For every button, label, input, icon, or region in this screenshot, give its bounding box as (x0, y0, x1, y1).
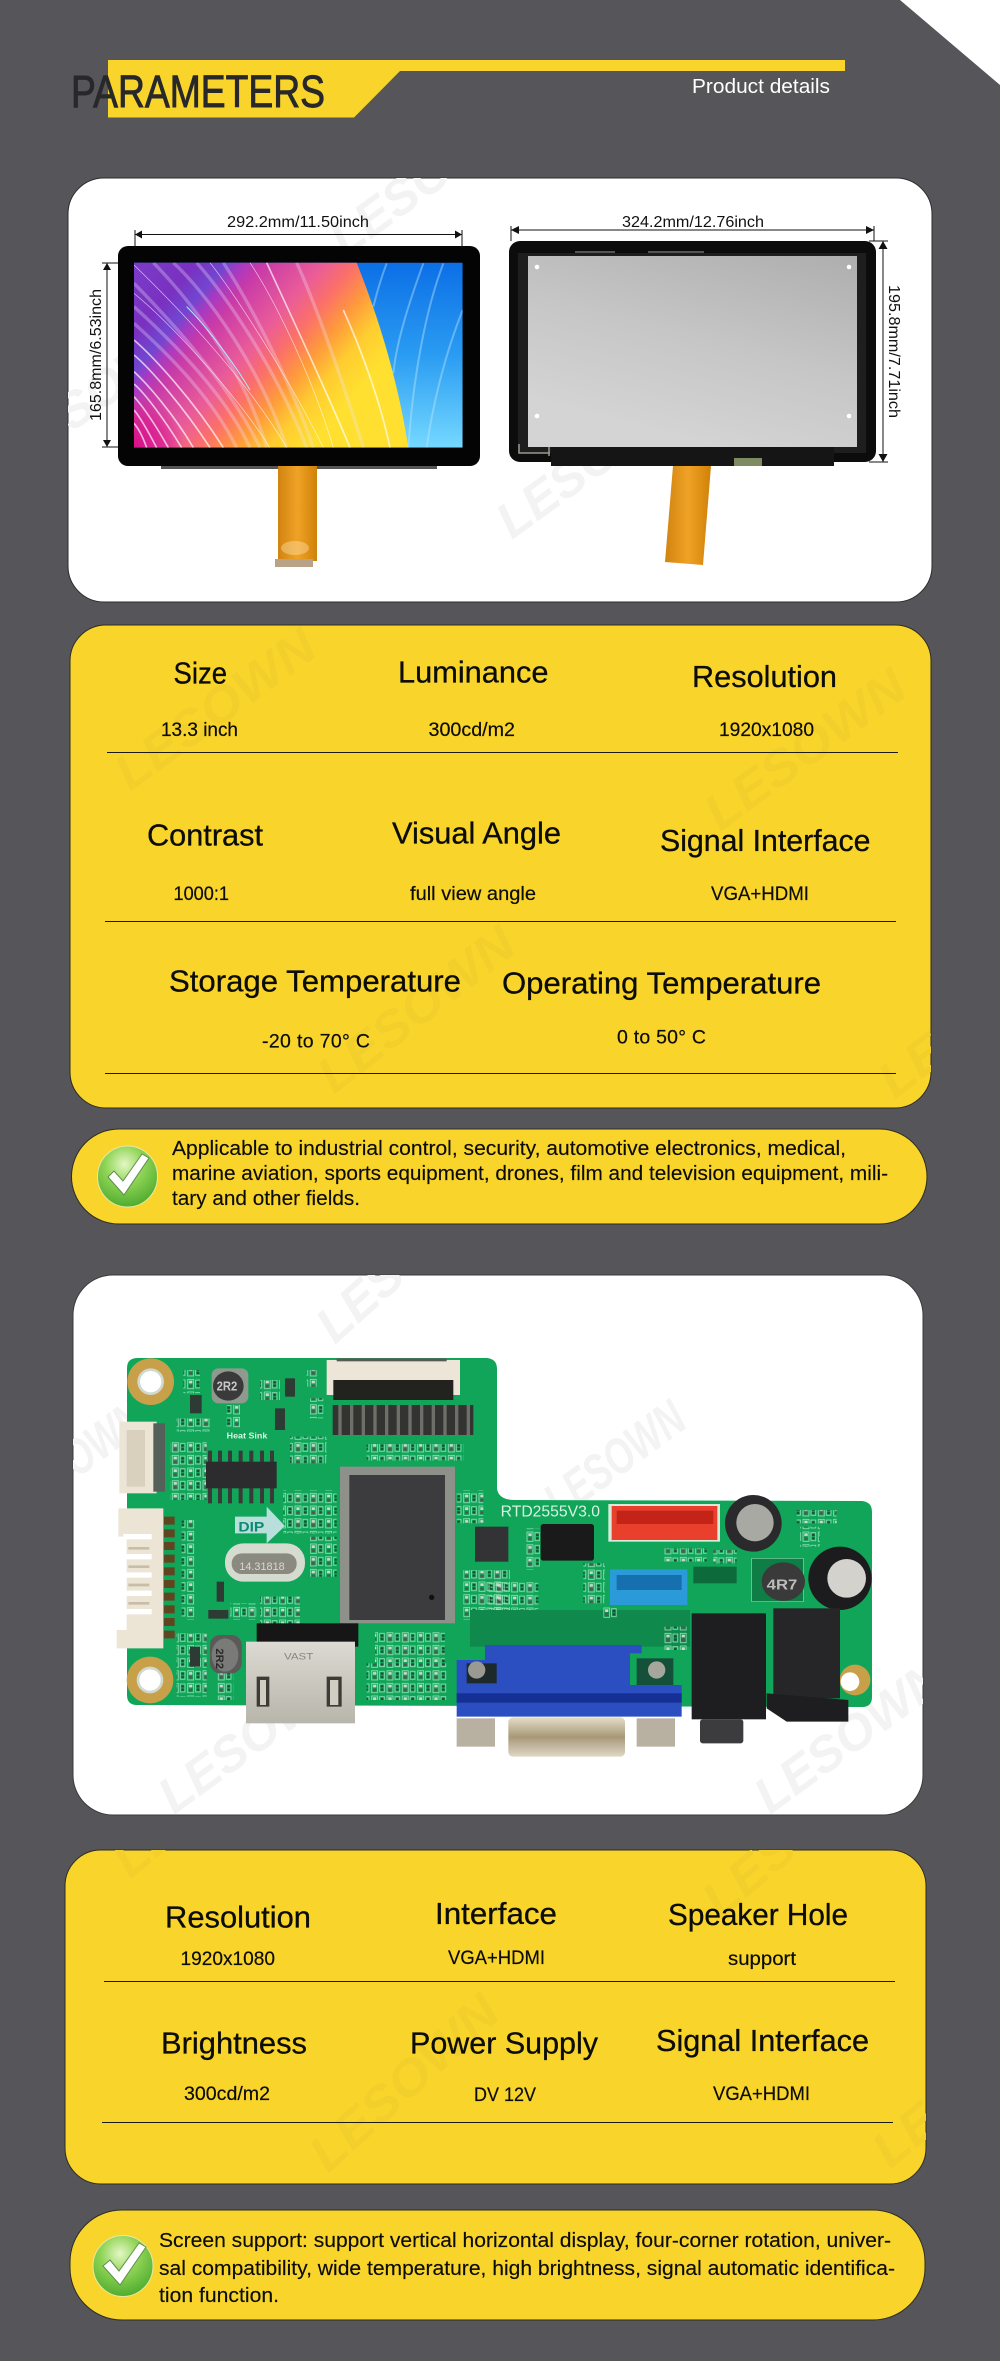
panel: screen dimensions: LESOWN (319, 92, 530, 267)
spec: signal interface (656, 2023, 869, 2105)
support text: Screen support: support vertical horizontal display, four-corner rotation, univer- (159, 2229, 891, 2252)
panel: screen dimensions (68, 178, 932, 602)
red connector (608, 1504, 720, 1542)
dimension: back height: 195.8mm/7.71inch (885, 285, 902, 418)
dimension: back height (869, 241, 902, 462)
panel: board specifications: LESOWN (298, 1983, 511, 2182)
spec: signal interface: VGA+HDMI (711, 883, 809, 905)
jumpers (541, 1524, 594, 1561)
board label: RTD2555V3.0 (501, 1504, 600, 1521)
spec: contrast: 1000:1 (174, 883, 229, 905)
application text: tary and other fields. (172, 1187, 360, 1210)
spec: speaker hole (668, 1897, 848, 1970)
inductors: 2R2 (213, 1648, 225, 1669)
spec: interface: Interface (435, 1896, 557, 1931)
spec: speaker hole: support (728, 1948, 797, 1970)
callout: screen support (70, 2210, 925, 2320)
dip arrow: DIP (238, 1519, 264, 1535)
left screen front (118, 246, 480, 567)
spec: brightness: 300cd/m2 (184, 2083, 270, 2105)
spec: operating temperature: 0 to 50° C (617, 1026, 706, 1048)
thin streaks (134, 263, 333, 448)
panel: display specifications: LESOWN (694, 657, 917, 841)
left half of board (117, 1358, 510, 1723)
inductor 4R7: 4R7 (767, 1577, 797, 1593)
hdmi port: VAST (284, 1651, 314, 1661)
soft lavender streaks (134, 263, 363, 448)
regulator chip (475, 1527, 508, 1562)
dimension: front width: 292.2mm/11.50inch (227, 214, 369, 231)
spec: contrast: Contrast (147, 818, 263, 852)
heading banner (108, 60, 845, 118)
audio jack (692, 1613, 766, 1743)
panel: display specifications: LESOWN (104, 617, 327, 801)
spec: visual angle: full view angle (410, 883, 536, 905)
spec: power supply: Power Supply (410, 2026, 598, 2060)
inductor 4R7 (752, 1558, 805, 1602)
spec: storage temperature: Storage Temperature (169, 964, 461, 998)
spec: operating temperature: Operating Temperature (502, 966, 821, 1000)
hdmi port (246, 1623, 358, 1723)
inductors: 2R2 (217, 1380, 237, 1394)
spec: interface: VGA+HDMI (448, 1947, 545, 1969)
spec: power supply (410, 2026, 598, 2106)
spec: resolution (692, 659, 837, 741)
panel: driver board photo: LESOWN (744, 1649, 955, 1824)
right half of board (457, 1495, 872, 1757)
dimension: front height (88, 263, 118, 447)
spec: interface (435, 1896, 557, 1969)
panel: board specifications: LESOWN (691, 1734, 908, 1928)
small side connector (119, 1422, 165, 1493)
spec: resolution: 1920x1080 (180, 1948, 275, 1970)
spec: size (161, 656, 238, 741)
spec: resolution: Resolution (692, 659, 837, 694)
spec: resolution: Resolution (165, 1900, 311, 1934)
panel: driver board photo: LESOWN (148, 1649, 359, 1824)
support text: sal compatibility, wide temperature, high brightness, signal automatic identifica- (159, 2257, 895, 2280)
spec: speaker hole: Speaker Hole (668, 1897, 848, 1932)
spec: resolution: 1920x1080 (719, 719, 814, 741)
sop ic (206, 1451, 277, 1503)
dc power jack (767, 1608, 848, 1722)
panel: display specifications (70, 617, 1000, 1109)
hole right (840, 1665, 870, 1695)
spec: size: Size (174, 656, 227, 690)
spec: power supply: DV 12V (474, 2084, 536, 2106)
spec: brightness: Brightness (161, 2026, 307, 2060)
spec: signal interface: VGA+HDMI (713, 2083, 810, 2105)
spec: luminance: 300cd/m2 (428, 719, 515, 741)
spec: storage temperature: -20 to 70° C (262, 1030, 370, 1052)
heat sink label: Heat Sink (227, 1431, 268, 1440)
dimension: front width (135, 214, 462, 248)
spec: storage temperature (169, 964, 461, 1052)
spec: signal interface: Signal Interface (660, 823, 870, 858)
application text: marine aviation, sports equipment, drones, film and television equipment, mili- (172, 1162, 888, 1185)
spec: luminance: Luminance (398, 654, 548, 690)
dimension: back width (511, 214, 874, 241)
mounting holes (127, 1358, 174, 1703)
main processor (340, 1467, 455, 1623)
panel: screen dimensions: LESOWN (486, 374, 697, 549)
blue connector (610, 1569, 687, 1605)
vga port (457, 1645, 682, 1757)
bright streaks (134, 263, 390, 448)
inductors (210, 1368, 248, 1673)
dip arrow (235, 1507, 285, 1543)
spec: visual angle (392, 816, 561, 905)
application text: Applicable to industrial control, security, automotive electronics, medical, (172, 1137, 846, 1160)
spec: brightness (161, 2026, 307, 2105)
panel: driver board photo (72, 1274, 924, 1816)
panel: driver board photo: LESOWN (534, 1389, 696, 1529)
dimension: back width: 324.2mm/12.76inch (622, 214, 764, 231)
panel: driver board photo: LESOWN (305, 1164, 507, 1353)
icon: green check (98, 1146, 158, 1207)
transistors dark (693, 1567, 737, 1583)
spec: luminance (398, 654, 548, 741)
spec: size: 13.3 inch (161, 719, 238, 741)
right screen back (509, 241, 876, 565)
title: PARAMETERS (71, 66, 325, 117)
header (71, 60, 845, 118)
capacitors (725, 1495, 872, 1610)
component clusters (488, 1510, 837, 1650)
pin header (333, 1405, 473, 1435)
component clusters (170, 1370, 510, 1700)
callout: applications (72, 1129, 927, 1224)
blue area streaks (373, 263, 463, 448)
spec: visual angle: Visual Angle (392, 816, 561, 850)
panel: board specifications: LESOWN (101, 1694, 318, 1888)
icon: green check (93, 2236, 153, 2296)
crystal: 14.31818 (239, 1561, 285, 1573)
shaded area (470, 1610, 690, 1647)
spec: resolution (165, 1900, 311, 1970)
spec: signal interface: Signal Interface (656, 2023, 869, 2058)
crystal (225, 1543, 305, 1582)
ribbon connector (327, 1358, 460, 1400)
small transistors (190, 1378, 295, 1667)
spec: signal interface (660, 823, 870, 905)
spec: contrast (147, 818, 263, 905)
dimension: front height: 165.8mm/6.53inch (88, 289, 105, 421)
circuit board (117, 1358, 872, 1757)
support text: tion function. (159, 2284, 279, 2307)
panel: board specifications (64, 1850, 926, 2184)
subtitle: Product details (692, 75, 830, 98)
large side connector (117, 1508, 169, 1648)
support text (159, 2229, 895, 2307)
application text (172, 1137, 888, 1210)
corner triangle (900, 0, 1000, 85)
panel: display specifications: LESOWN (306, 914, 527, 1104)
spec: operating temperature (502, 966, 821, 1048)
